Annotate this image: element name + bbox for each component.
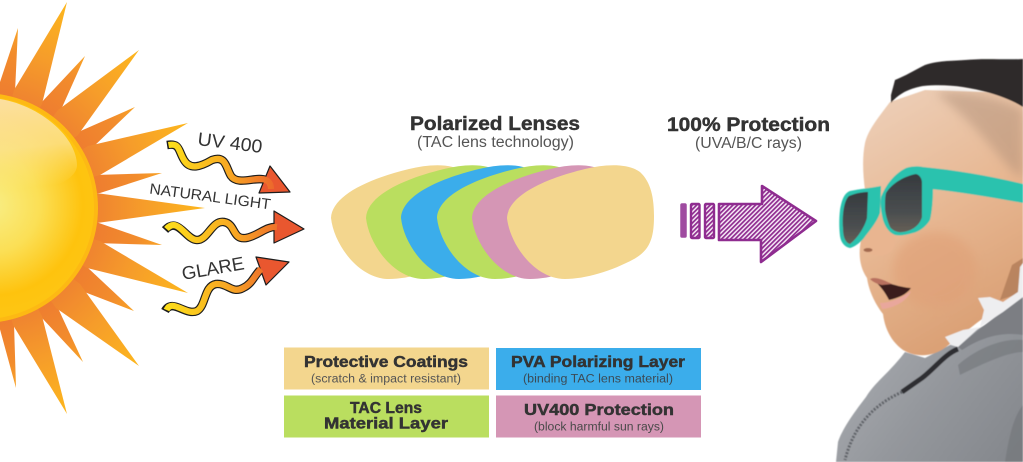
legend: PVA polarizing layer	[496, 348, 701, 390]
legend: UV400 protection: (block harmful sun rays)	[534, 422, 664, 434]
label: glare: GLARE	[180, 252, 246, 284]
lens: protective coating back	[331, 165, 478, 279]
legend: PVA polarizing layer: (binding TAC lens material)	[523, 374, 673, 386]
legend: protective coatings: Protective Coatings	[304, 354, 468, 371]
big lens frame	[881, 166, 933, 235]
hood fold	[958, 297, 1023, 350]
sun	[0, 2, 205, 414]
big lens	[885, 174, 922, 232]
legend: TAC lens material layer: TAC Lens	[350, 400, 422, 417]
jacket fold shading	[958, 340, 1023, 462]
heading: 100% protection: 100% Protection	[667, 114, 830, 136]
legend: protective coatings	[284, 348, 489, 390]
sun rays	[0, 2, 205, 414]
lens layer stack	[331, 165, 654, 279]
hairline fade	[935, 92, 1023, 178]
lens: protective coating front	[507, 165, 654, 279]
lower lip	[880, 291, 911, 309]
sun highlight	[0, 99, 77, 198]
lens: PVA	[401, 165, 548, 279]
wavy arrow: UV 400	[167, 145, 290, 193]
legend: TAC lens material layer: Material Layer	[324, 416, 448, 432]
zipper	[902, 349, 958, 392]
lens: TAC front	[437, 165, 584, 279]
baby wearing teal sunglasses	[836, 59, 1023, 462]
label: natural light: NATURAL LIGHT	[148, 181, 272, 213]
small lens	[843, 192, 868, 244]
cheek shading	[893, 232, 977, 308]
legend: UV400 protection: UV400 Protection	[524, 402, 674, 419]
lens: UV400	[472, 165, 619, 279]
purple sketched arrow	[681, 186, 816, 262]
jacket seam	[845, 392, 902, 460]
face	[860, 90, 1023, 355]
label: UV 400: UV 400	[197, 128, 264, 157]
neck shadow	[1000, 258, 1023, 300]
nose	[861, 213, 895, 255]
fleece jacket	[836, 295, 1023, 462]
legend: protective coatings: (scratch & impact resistant)	[311, 374, 461, 386]
mouth	[875, 281, 911, 300]
upper lip	[870, 278, 892, 285]
hair	[891, 59, 1023, 107]
sun disc	[0, 93, 98, 323]
legend: TAC lens material layer	[284, 396, 489, 438]
subheading: TAC lens technology: (TAC lens technology)	[417, 134, 574, 151]
lens: TAC back	[366, 165, 513, 279]
wavy arrow: natural light	[165, 211, 304, 243]
white collar trim: lower	[945, 327, 980, 347]
nostril	[864, 248, 872, 252]
subheading: UVA/B/C rays: (UVA/B/C rays)	[695, 135, 802, 152]
small lens frame	[839, 186, 881, 248]
legend: UV400 protection	[496, 396, 701, 438]
white collar trim: upper	[978, 263, 1023, 327]
legend: PVA polarizing layer: PVA Polarizing Layer	[511, 354, 685, 371]
temple arm	[923, 167, 1023, 203]
heading: polarized lenses: Polarized Lenses	[410, 113, 580, 135]
wavy arrow: glare	[165, 257, 289, 312]
